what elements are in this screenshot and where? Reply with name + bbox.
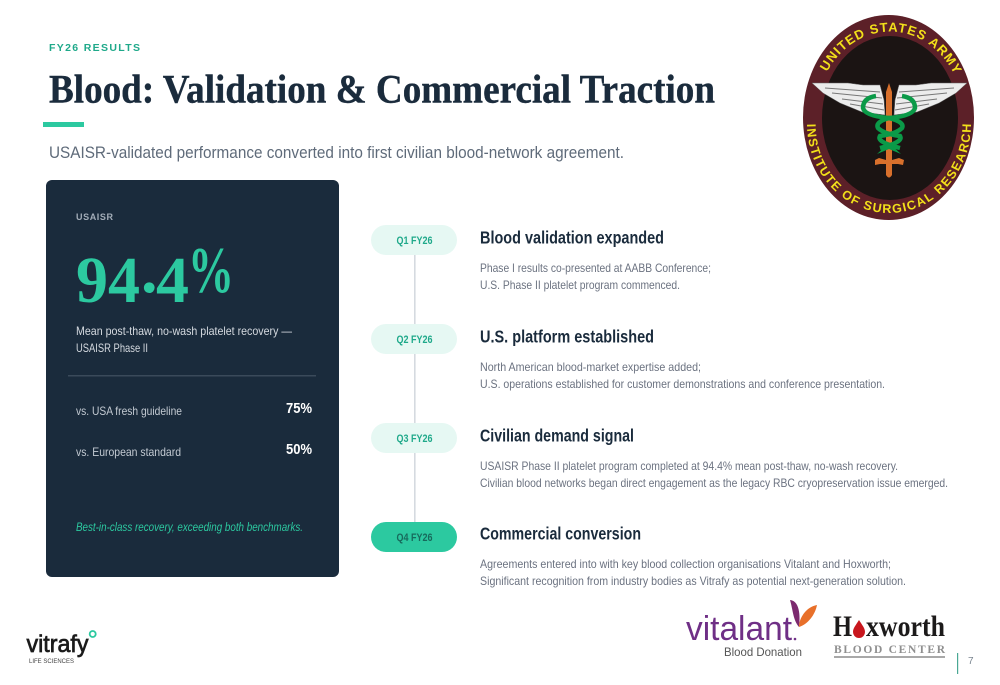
timeline item: Q4: Q4 FY26 — [396, 532, 432, 544]
comparison: USA fresh guideline — [76, 400, 312, 418]
timeline item: Q1: Phase I results co-presented at AABB Conference; — [480, 261, 711, 275]
timeline item: Q3: Civilian blood networks began direct engagement as the legacy RBC cryopreservation issue emerged. — [480, 476, 948, 490]
panel note: Best-in-class recovery, exceeding both benchmarks. — [76, 522, 303, 534]
logo: Vitrafy Life Sciences: vitrafy — [26, 631, 88, 658]
timeline item: Q3 — [371, 423, 948, 490]
comparison: USA fresh guideline: 75% — [286, 400, 312, 417]
page number — [957, 653, 974, 674]
metric description: USAISR Phase II — [76, 341, 148, 355]
subtitle: USAISR-validated performance converted into first civilian blood-network agreement. — [49, 144, 624, 162]
emblem: US Army Institute of Surgical Research — [803, 15, 974, 220]
timeline connector — [414, 250, 416, 530]
timeline item: Q4: Agreements entered into with key blood collection organisations Vitalant and Hoxworth; — [480, 557, 891, 571]
timeline item: Q3: Civilian demand signal — [480, 426, 634, 446]
panel background — [46, 180, 339, 577]
title accent bar — [43, 122, 84, 127]
logo: Hoxworth Blood Center: BLOOD CENTER — [834, 644, 946, 656]
serpents — [863, 96, 902, 148]
timeline item: Q1 — [371, 225, 711, 292]
timeline item: Q2: U.S. platform established — [480, 326, 654, 346]
timeline item: Q1: Q1 FY26 — [396, 235, 432, 247]
eyebrow: FY26 results: FY26 RESULTS — [49, 42, 140, 54]
page number: 7 — [968, 656, 974, 667]
timeline item: Q2 — [371, 324, 885, 391]
timeline item: Q4: Significant recognition from industry bodies as Vitrafy as potential next-generation solution. — [480, 574, 906, 588]
big metric: 94 — [76, 244, 140, 317]
title: Blood: Validation & Commercial Traction — [49, 66, 715, 112]
timeline item: Q2: North American blood-market expertise added; — [480, 360, 701, 374]
panel label: USAISR — [76, 212, 114, 222]
timeline item: Q4 — [371, 522, 906, 588]
big metric: . — [141, 234, 158, 307]
emblem: US Army Institute of Surgical Research: INSTITUTE OF SURGICAL RESEARCH — [807, 124, 972, 213]
emblem: US Army Institute of Surgical Research: UNITED STATES ARMY — [820, 22, 962, 72]
big metric: % — [188, 234, 234, 307]
comparison: USA fresh guideline: vs. USA fresh guideline — [76, 404, 182, 418]
timeline item: Q1: U.S. Phase II platelet program commenced. — [480, 278, 680, 292]
panel: USAISR key metric — [46, 180, 339, 577]
logo: Hoxworth Blood Center: H — [833, 610, 852, 643]
big metric: 4 — [156, 244, 189, 317]
logo: Vitrafy Life Sciences: LIFE SCIENCES — [29, 659, 74, 665]
logo: Vitalant Blood Donation: Blood Donation — [724, 645, 802, 659]
timeline item: Q1: Blood validation expanded — [480, 228, 664, 248]
timeline item: Q2: U.S. operations established for customer demonstrations and conference presentation. — [480, 377, 885, 391]
wings — [812, 83, 885, 115]
comparison: European standard: vs. European standard — [76, 445, 181, 459]
comparison: European standard: 50% — [286, 441, 312, 458]
logo: Vitalant Blood Donation: vitalant — [686, 610, 793, 648]
sword — [875, 83, 904, 178]
comparison: European standard — [76, 441, 312, 459]
timeline item: Q3: Q3 FY26 — [396, 433, 432, 445]
logo: Hoxworth Blood Center — [833, 610, 946, 658]
logo: Hoxworth Blood Center: xworth — [866, 610, 945, 643]
logo: Vitalant Blood Donation — [686, 600, 817, 659]
metric description: Mean post-thaw, no-wash platelet recovery — — [76, 324, 292, 338]
timeline item: Q4: Commercial conversion — [480, 524, 641, 544]
timeline item: Q3: USAISR Phase II platelet program completed at 94.4% mean post-thaw, no-wash recovery. — [480, 459, 898, 473]
timeline item: Q2: Q2 FY26 — [396, 334, 432, 346]
